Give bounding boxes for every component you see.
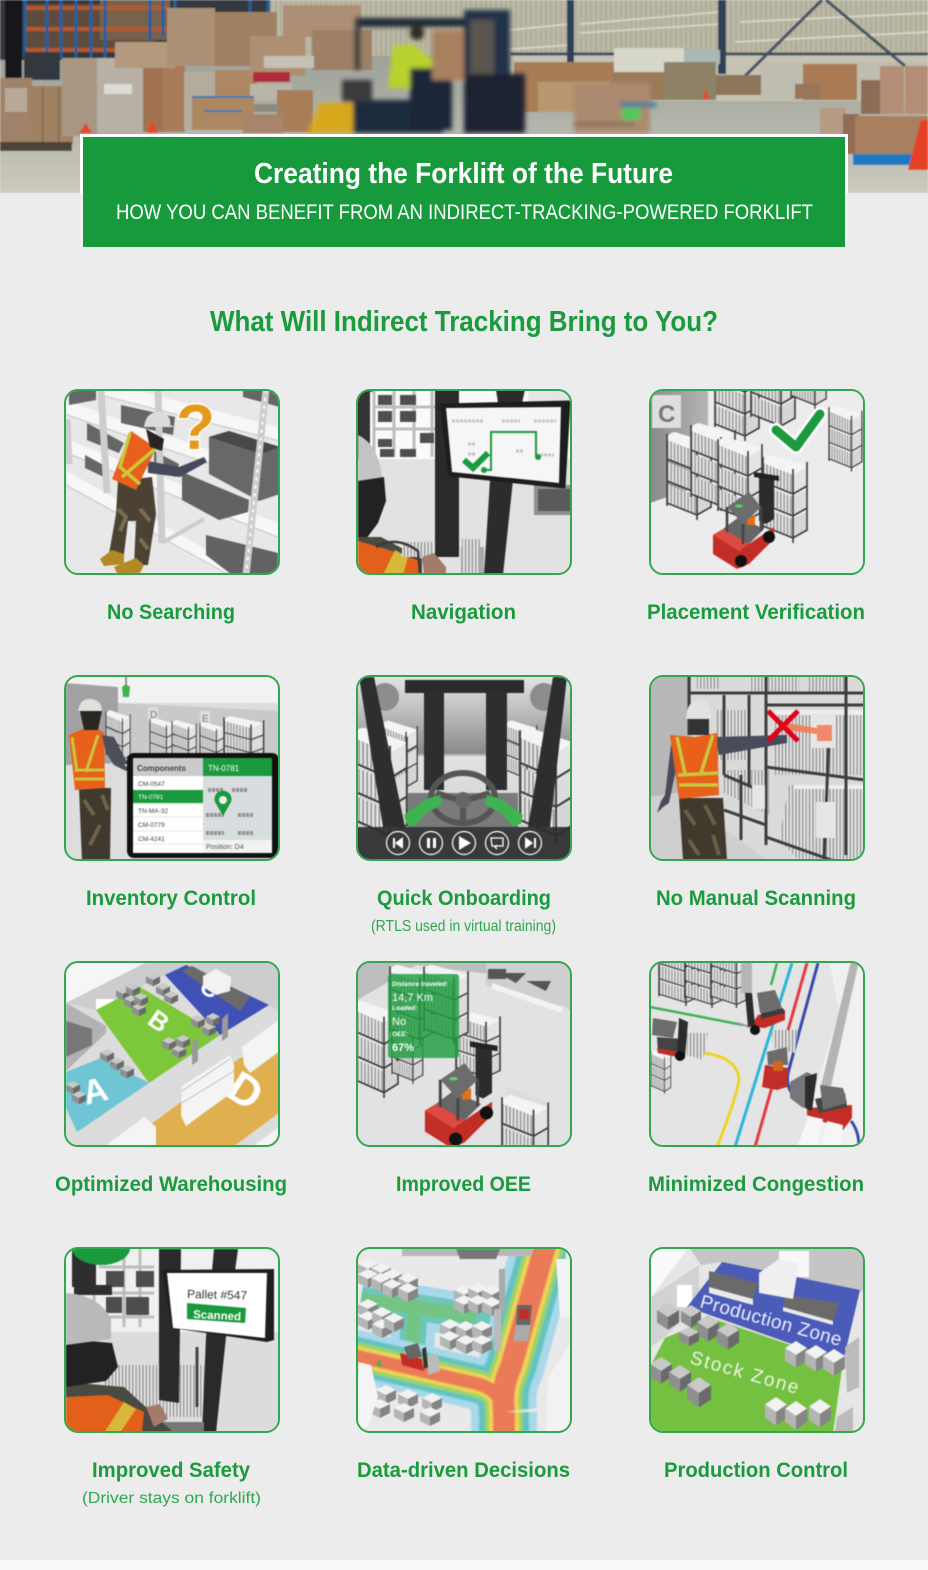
card: Inventory Control: [64, 675, 280, 910]
illustration: forklift placing rack with check: C: [658, 401, 675, 428]
illustration: forklifts in colored lanes: [649, 961, 865, 1147]
title banner: Creating the Forklift of the Future: [254, 158, 673, 190]
card: Production Control: [649, 1247, 865, 1482]
illustration: worker scanning with red cross: [649, 675, 865, 861]
illustration: worker with tablet showing component list: [64, 675, 280, 861]
label: Improved Safety: [82, 1459, 261, 1507]
illustration: forklift placing rack with check: [649, 389, 865, 575]
card: Navigation: [356, 389, 572, 624]
illustration: warehouse zones map: B: [143, 1003, 175, 1039]
label: Improved Safety: (Driver stays on forklift): [82, 1490, 261, 1507]
icon: forklift top: [737, 990, 785, 1035]
illustration: warehouse zones map: D: [219, 1062, 272, 1120]
label: Data-driven Decisions: Data-driven Decisions: [357, 1459, 570, 1482]
component: OEE data overlay: OEE:: [392, 1031, 408, 1038]
label: No Searching: No Searching: [107, 601, 235, 624]
component: OEE data overlay: No: [392, 1016, 406, 1028]
component: tablet list panel: CM-0779: [138, 822, 165, 829]
illustration: production and stock zones: Stock Zone: [688, 1348, 801, 1399]
label: Improved Safety: Improved Safety: [92, 1459, 250, 1482]
component: tablet list panel: TN-0781: [138, 794, 164, 801]
icon: green gloves: [404, 795, 523, 827]
illustration: warehouse zones map: A: [79, 1070, 112, 1113]
label: Minimized Congestion: Minimized Congestion: [648, 1173, 864, 1196]
label: Production Control: Production Control: [664, 1459, 848, 1482]
component: tablet list panel: TN-0781: [208, 764, 240, 773]
label: Quick Onboarding: (RTLS used in virtual training): [371, 918, 556, 935]
icon: worker: [100, 412, 207, 575]
icon: worker with handheld: [69, 699, 138, 861]
component: tablet list panel: CM-4241: [138, 836, 165, 843]
icon: driver: [66, 1293, 174, 1433]
icon: forklift: [713, 472, 779, 569]
icon: question mark: ?: [176, 391, 215, 463]
label: Placement Verification: Placement Verification: [647, 601, 865, 624]
component: tablet list panel: CM-0547: [138, 781, 165, 788]
component: OEE data overlay: 14,7 Km: [392, 992, 433, 1004]
icon: blurred forklift and driver: [307, 10, 656, 133]
illustration: warehouse zones map: [64, 961, 280, 1147]
component: OEE data overlay: Loaded:: [392, 1005, 417, 1012]
card: Improved OEE: [356, 961, 572, 1196]
component: tablet list panel: Components: [137, 764, 186, 773]
label: Quick Onboarding: Quick Onboarding: [377, 887, 551, 910]
card: Quick Onboarding: [356, 675, 572, 935]
icon: tablet map with route: [441, 402, 569, 487]
card: No Manual Scanning: [649, 675, 865, 910]
component: tablet list panel: [127, 753, 279, 858]
illustration: floor heatmap: [356, 1247, 572, 1433]
label: Inventory Control: Inventory Control: [86, 887, 256, 910]
bottom strip: [0, 1560, 928, 1570]
illustration: warehouse zones map: C: [195, 973, 224, 1005]
component: OEE data overlay: Distance traveled:: [392, 981, 448, 988]
icon: check mark: [776, 414, 820, 447]
card: Improved Safety: [64, 1247, 280, 1507]
icon: forklift right with crate: [790, 1072, 852, 1130]
component: OEE data overlay: [388, 974, 459, 1058]
component: tablet list panel: Position: D4: [206, 844, 244, 851]
label: Navigation: Navigation: [411, 601, 516, 624]
illustration: virtual training cab view with playback controls: [356, 675, 572, 861]
icon: worker from behind: [657, 700, 787, 860]
component: pallet scanned screen: [162, 1269, 274, 1342]
illustration: worker with tablet showing component list: E: [202, 714, 209, 725]
label: Optimized Warehousing: Optimized Warehousing: [55, 1173, 287, 1196]
card: Minimized Congestion: [648, 961, 865, 1196]
icon: forklift: [425, 1041, 498, 1148]
boxes left: [0, 78, 32, 144]
card: Data-driven Decisions: [356, 1247, 572, 1482]
icon: red cross: [768, 711, 798, 741]
card: Optimized Warehousing: [55, 961, 287, 1196]
title banner: [80, 134, 848, 247]
illustration: forklift navigation screen: [356, 389, 572, 575]
component: tablet list panel: TN-MA-32: [138, 808, 168, 815]
illustration: production and stock zones: Production Zone: [698, 1292, 844, 1351]
illustration: forklift with OEE overlay: [356, 961, 572, 1147]
card: No Searching: [64, 389, 280, 624]
component: OEE data overlay: 67%: [392, 1042, 414, 1054]
component: pallet scanned screen: Scanned: [193, 1309, 241, 1324]
icon: forklift left with load: [652, 1018, 708, 1061]
label: Improved OEE: Improved OEE: [396, 1173, 531, 1196]
illustration: worker with tablet showing component list: D: [150, 710, 157, 721]
component: playback control bar: [356, 827, 572, 861]
card: Placement Verification: [647, 389, 865, 624]
right crates: [514, 62, 614, 112]
illustration: production and stock zones: [649, 1247, 865, 1433]
header photo: warehouse with blurred forklift: [0, 0, 928, 193]
icon: forklift center with load: [762, 1030, 798, 1090]
component: pallet scanned screen: Pallet #547: [187, 1287, 248, 1303]
icon: forklift left: [400, 1343, 440, 1375]
illustration: driver viewing scanned pallet screen: [64, 1247, 280, 1433]
illustration: worker searching shelves: [64, 389, 280, 575]
label: No Manual Scanning: No Manual Scanning: [656, 887, 856, 910]
label: Quick Onboarding: [371, 887, 556, 935]
icon: forklift right: [513, 1305, 532, 1341]
